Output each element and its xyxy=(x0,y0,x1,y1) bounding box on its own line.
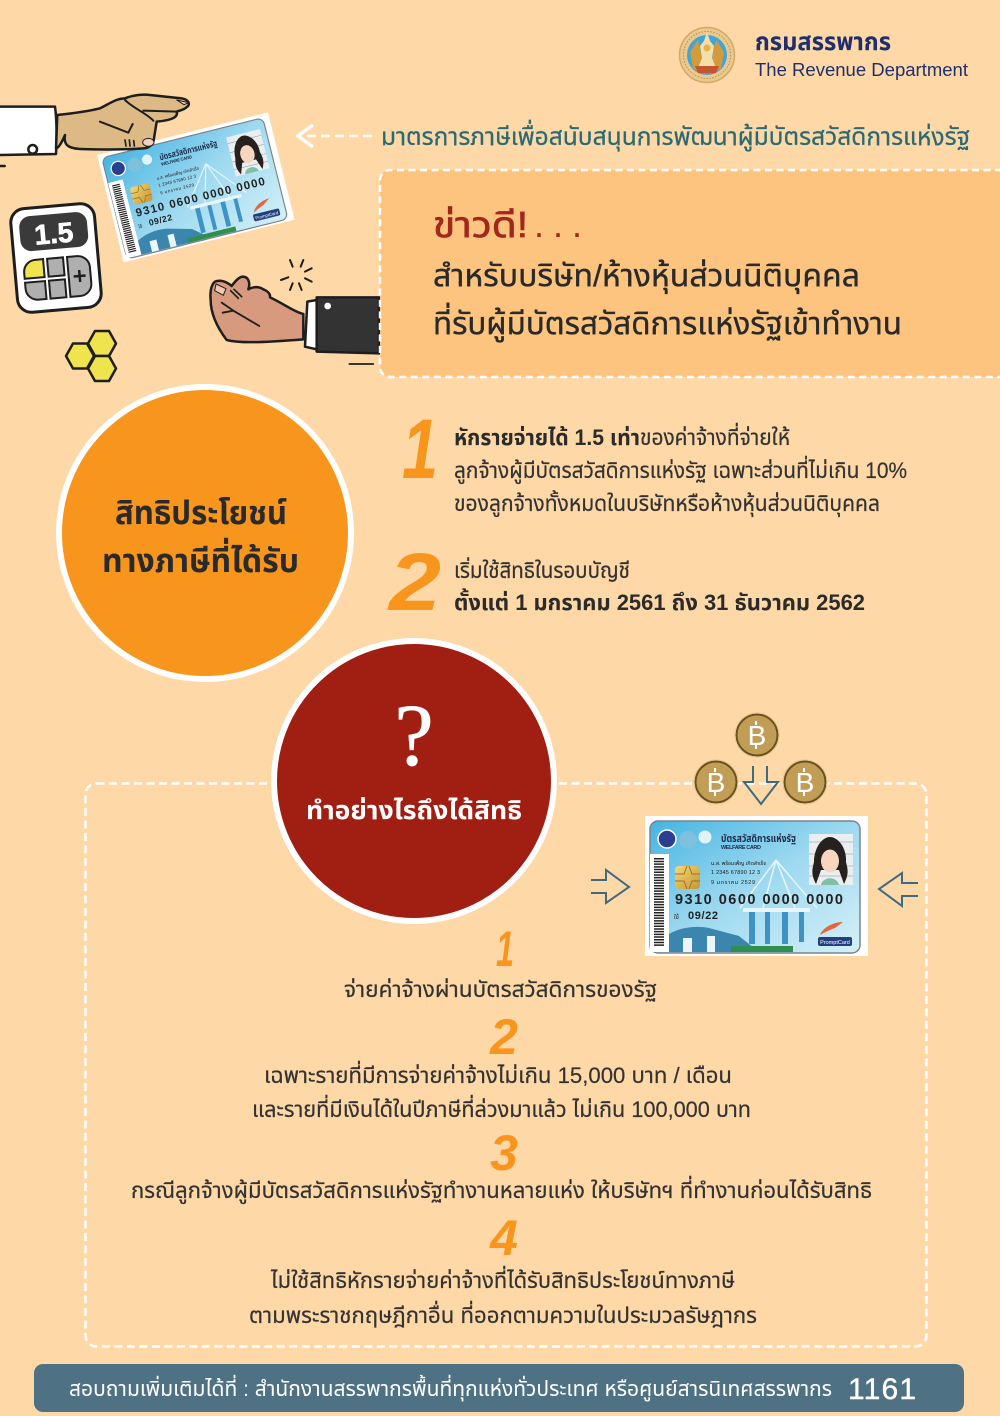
good news line 1: สำหรับบริษัท/ห้างหุ้นส่วนนิติบุคคล xyxy=(433,258,860,294)
welfare card large: WELFARE CARD xyxy=(721,845,761,851)
arrow: down xyxy=(744,766,778,804)
benefit 1 text: ของลูกจ้างทั้งหมดในบริษัทหรือห้างหุ้นส่วนนิติบุคคล xyxy=(454,489,880,517)
welfare card tilted xyxy=(97,112,295,262)
how to heading: ทำอย่างไรถึงได้สิทธิ xyxy=(306,795,522,825)
logo: Revenue Department xyxy=(680,28,968,82)
logo text English: The Revenue Department xyxy=(755,60,968,80)
welfare card tilted: PromptCard xyxy=(255,210,279,221)
black sleeve xyxy=(317,297,379,353)
step 2 text: และรายที่มีเงินได้ในปีภาษีที่ล่วงมาแล้ว ไม่เกิน 100,000 บาท xyxy=(252,1094,751,1122)
welfare card large: น.ส. พร้อมเพ็ญ เกิดสำเร็จ xyxy=(711,860,766,867)
icon: baht coins: B xyxy=(796,767,814,798)
benefit 2 text xyxy=(454,556,865,615)
arrow: right xyxy=(591,870,629,903)
panel: how to claim, dashed frame xyxy=(86,784,926,1346)
benefit 2 text: เริ่มใช้สิทธิในรอบบัญชี xyxy=(454,556,630,583)
arrow: dashed pointer to card xyxy=(298,125,372,147)
benefit 2 text: ตั้งแต่ 1 มกราคม 2561 ถึง 31 ธันวาคม 2562 xyxy=(454,588,865,615)
icon: calculator 1.5: 1.5 xyxy=(33,216,75,251)
panel: good news xyxy=(380,170,1000,377)
welfare card large: 9 มกราคม 2529 xyxy=(711,880,755,886)
welfare card tilted: 9310 0600 0000 0000 xyxy=(135,176,266,220)
benefit 1 text: หักรายจ่ายได้ 1.5 เท่า xyxy=(454,425,640,450)
panel: how to circle xyxy=(274,641,554,921)
heading: good news: ข่าวดี! xyxy=(433,204,528,245)
hotline number: 1161 xyxy=(848,1373,916,1406)
card title: บัตรสวัสดิการแห่งรัฐ xyxy=(158,137,218,162)
step 3 text: กรณีลูกจ้างผู้มีบัตรสวัสดิการแห่งรัฐทำงานหลายแห่ง ให้บริษัทฯ ที่ทำงานก่อนได้รับสิทธิ xyxy=(131,1175,872,1204)
footer text: สอบถามเพิ่มเติมได้ที่ : สำนักงานสรรพากรพื้นที่ทุกแห่งทั่วประเทศ หรือศูนย์สารนิเทศสรรพากร xyxy=(69,1374,832,1402)
step 1 text: จ่ายค่าจ้างผ่านบัตรสวัสดิการของรัฐ xyxy=(344,977,657,1002)
illustration: hand holding card xyxy=(0,95,189,166)
illustration: receiving hand xyxy=(210,260,379,364)
step 1 number: 1 xyxy=(496,921,514,977)
welfare card large xyxy=(645,816,868,956)
number 1: 1 xyxy=(402,402,438,496)
benefit 1 text xyxy=(454,422,907,517)
welfare card large: ใช้ xyxy=(674,914,679,921)
icon: calculator 1.5 xyxy=(10,203,102,313)
welfare card large: 1 2345 67890 12 3 xyxy=(711,870,760,876)
welfare card tilted: ใช้ xyxy=(138,223,144,230)
step 4 number: 4 xyxy=(489,1210,518,1266)
welfare card tilted: 9 มกราคม 2529 xyxy=(160,182,195,195)
hand xyxy=(210,277,303,342)
tax benefit heading line 2: ทางภาษีที่ได้รับ xyxy=(102,537,299,579)
welfare card tilted: WELFARE CARD xyxy=(161,154,192,167)
step 2 text xyxy=(252,1060,751,1122)
benefit 2 xyxy=(387,537,865,628)
white sleeve xyxy=(0,107,57,155)
step 4 text xyxy=(249,1265,757,1328)
good news line 2: ที่รับผู้มีบัตรสวัสดิการแห่งรัฐเข้าทำงาน xyxy=(433,302,902,342)
step 4 text: ไม่ใช้สิทธิหักรายจ่ายค่าจ้างที่ได้รับสิทธิประโยชน์ทางภาษี xyxy=(270,1265,735,1293)
step 3 number: 3 xyxy=(490,1125,518,1181)
benefit 1 text: ลูกจ้างผู้มีบัตรสวัสดิการแห่งรัฐ เฉพาะส่วนที่ไม่เกิน 10% xyxy=(454,455,907,484)
step 2 number: 2 xyxy=(489,1009,518,1065)
welfare card tilted: 1 2345 67890 12 3 xyxy=(158,173,197,188)
step 2 text: เฉพาะรายที่มีการจ่ายค่าจ้างไม่เกิน 15,000 บาท / เดือน xyxy=(264,1060,732,1088)
panel: tax benefit circle xyxy=(59,387,351,679)
icon: baht coins: B xyxy=(707,767,725,798)
heading: good news xyxy=(433,204,582,245)
icon: department seal xyxy=(680,28,734,82)
question mark: ? xyxy=(394,688,434,785)
benefit 1 xyxy=(402,402,907,517)
subtitle: มาตรการภาษีเพื่อสนับสนุนการพัฒนาผู้มีบัตรสวัสดิการแห่งรัฐ xyxy=(381,119,970,152)
hand xyxy=(56,95,189,149)
heading: good news: ... xyxy=(534,204,582,245)
card title: บัตรสวัสดิการแห่งรัฐ xyxy=(721,832,797,845)
sparkle lines xyxy=(281,260,312,290)
welfare card tilted: น.ส. พร้อมเพ็ญ เกิดสำเร็จ xyxy=(156,164,200,181)
welfare card large: 09/22 xyxy=(688,910,718,922)
arrow: left xyxy=(879,873,918,906)
benefit 1 text: ของค่าจ้างที่จ่ายให้ xyxy=(640,422,790,450)
tax benefit heading line 1: สิทธิประโยชน์ xyxy=(115,494,287,531)
welfare card large: PromptCard xyxy=(820,940,850,946)
number 2: 2 xyxy=(387,537,441,628)
welfare card large: 9310 0600 0000 0000 xyxy=(675,892,843,908)
step 4 text: ตามพระราชกฤษฎีกาอื่น ที่ออกตามความในประมวลรัษฎากร xyxy=(249,1300,757,1328)
footer bar xyxy=(34,1364,964,1412)
welfare card tilted: 09/22 xyxy=(148,212,173,228)
logo text Thai: กรมสรรพากร xyxy=(755,28,891,56)
icon: baht coins: B xyxy=(748,720,766,751)
icon: baht coins xyxy=(694,713,827,804)
icon: yellow hexagons xyxy=(66,331,116,381)
